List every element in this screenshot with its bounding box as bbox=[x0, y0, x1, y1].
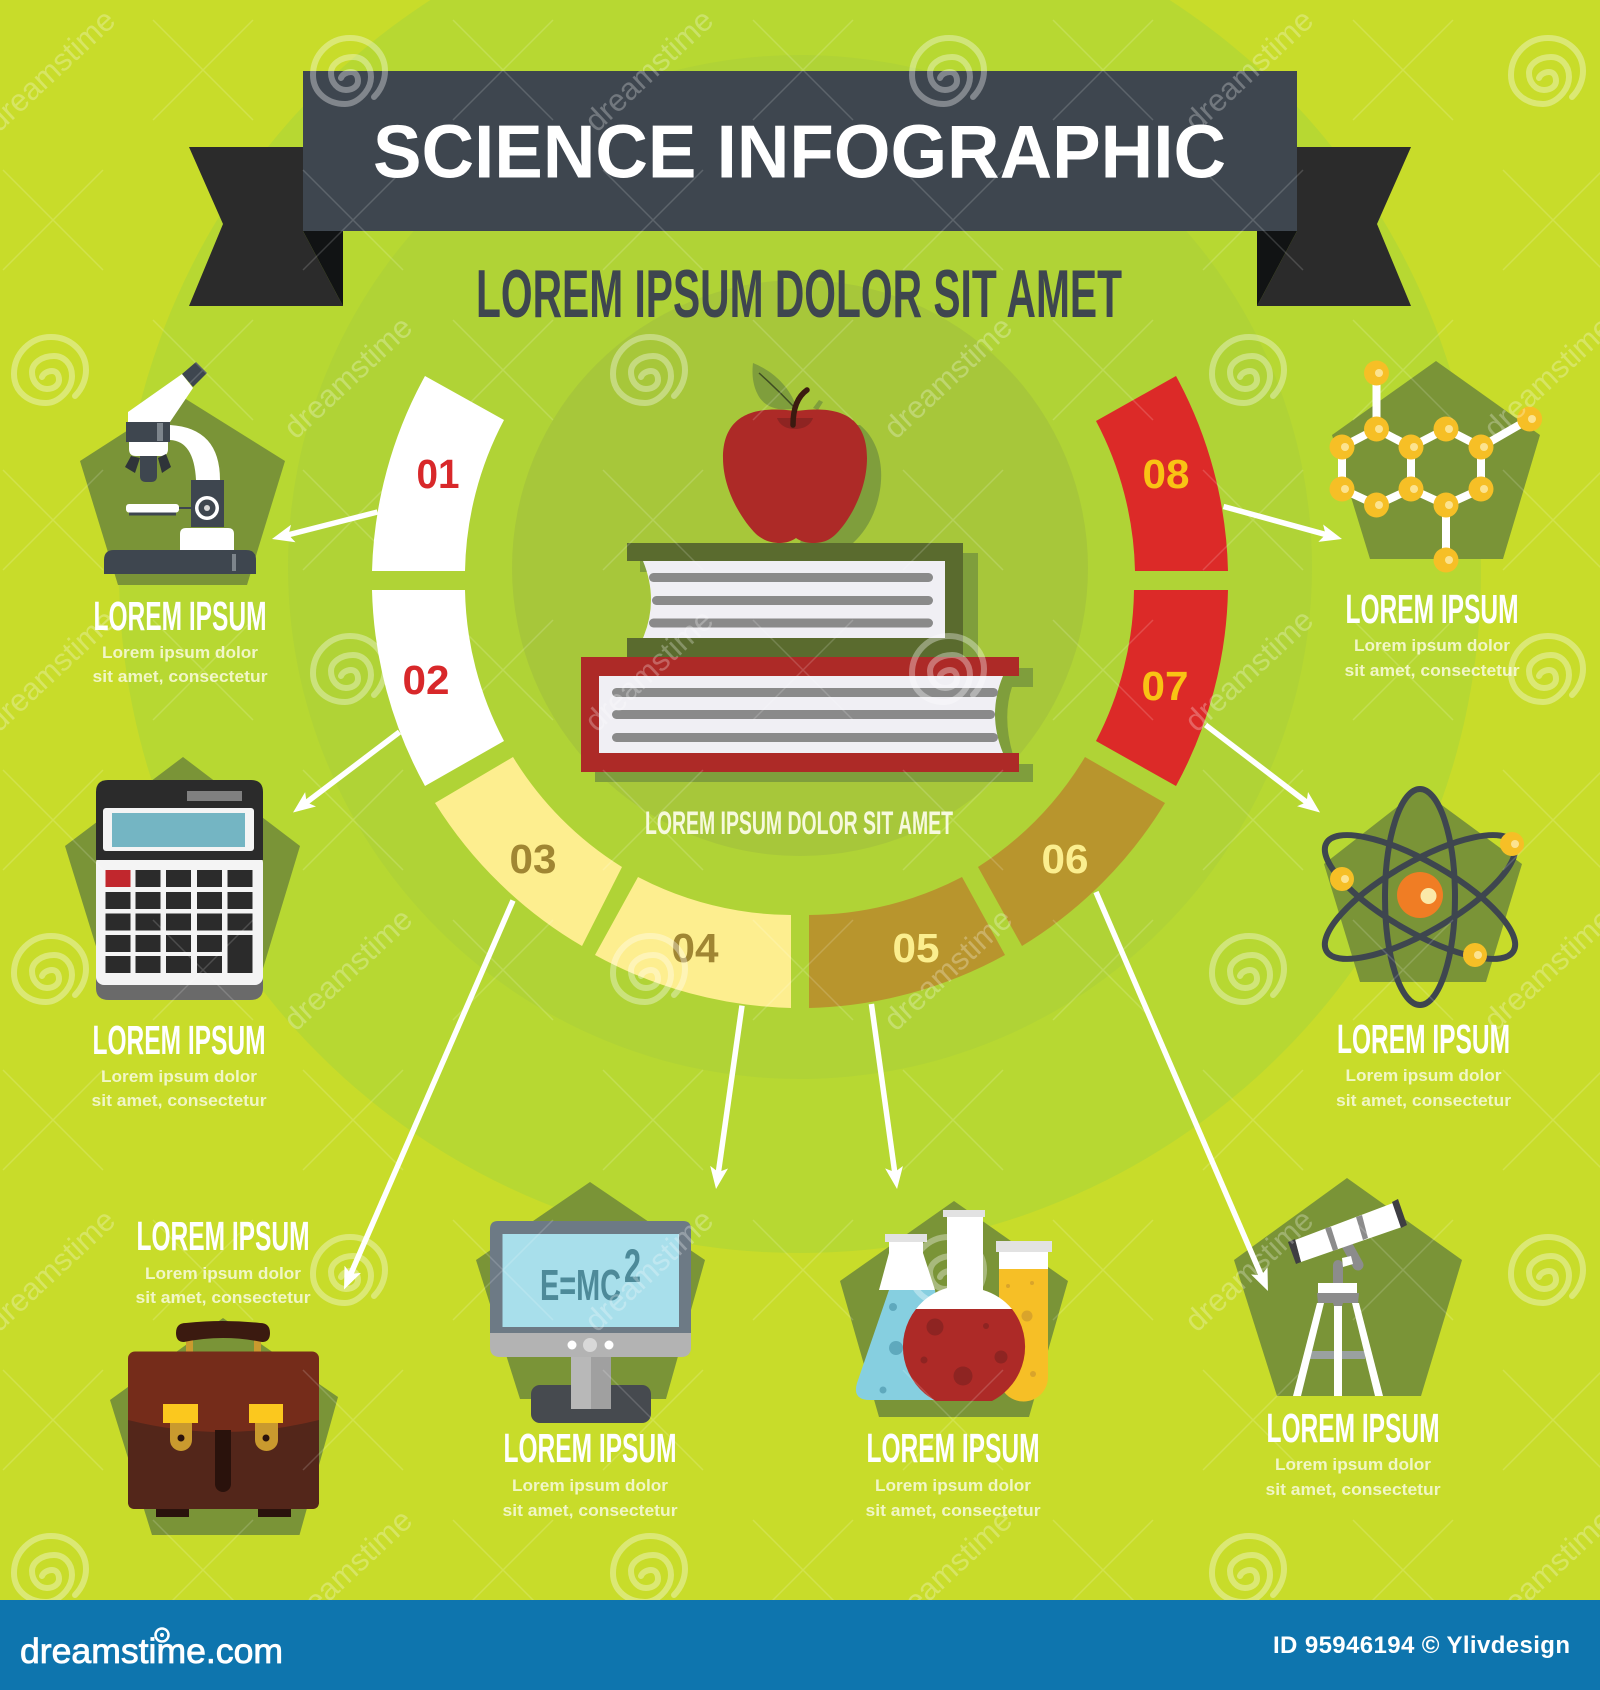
item: flasks bbox=[840, 1201, 1068, 1520]
footer image id and credit: ID 95946194 © Ylivdesign bbox=[1273, 1632, 1570, 1659]
watermark overlay: dreamstime bbox=[578, 602, 720, 738]
central illustration: apple on books bbox=[581, 363, 1033, 841]
label: Lorem ipsum dolor bbox=[875, 1476, 1031, 1495]
label: sit amet, consectetur bbox=[1336, 1091, 1511, 1110]
icon: apple bbox=[723, 363, 881, 543]
icon: calculator bbox=[65, 757, 300, 1000]
label bbox=[866, 1425, 1041, 1520]
item: telescope bbox=[1234, 1178, 1462, 1499]
arrow 03 bbox=[349, 900, 513, 1278]
segment 08 bbox=[1096, 376, 1228, 571]
segment 07: 07 bbox=[1142, 663, 1188, 709]
title: SCIENCE INFOGRAPHIC bbox=[373, 110, 1226, 194]
segment 03 bbox=[435, 757, 622, 946]
segment 05: 05 bbox=[892, 925, 940, 971]
segment 03: 03 bbox=[510, 836, 556, 882]
label: LOREM IPSUM bbox=[866, 1425, 1040, 1471]
watermark overlay: dreamstime bbox=[578, 2, 720, 138]
label bbox=[136, 1213, 311, 1307]
item: calculator bbox=[65, 757, 300, 1110]
icon: molecule bbox=[1330, 360, 1542, 572]
segment 05 bbox=[809, 877, 1005, 1008]
item: monitor bbox=[476, 1182, 705, 1520]
segment 07 bbox=[1096, 590, 1228, 786]
label: Lorem ipsum dolor bbox=[145, 1264, 301, 1283]
label bbox=[1344, 586, 1520, 680]
icon: atom bbox=[1309, 789, 1531, 1005]
arrow 02 bbox=[303, 732, 400, 805]
watermark overlay: dreamstime bbox=[277, 309, 419, 445]
label: LOREM IPSUM bbox=[504, 1425, 676, 1471]
arrow 05 bbox=[871, 1004, 895, 1177]
label: Lorem ipsum dolor bbox=[1346, 1066, 1502, 1085]
arrows from segments to items bbox=[284, 506, 1330, 1280]
item: atom bbox=[1309, 789, 1531, 1110]
icon: flasks bbox=[840, 1201, 1068, 1417]
segment 04 bbox=[595, 877, 791, 1008]
segment 04: 04 bbox=[672, 925, 719, 971]
item: briefcase bbox=[110, 1213, 338, 1535]
label: sit amet, consectetur bbox=[1266, 1480, 1441, 1499]
label bbox=[502, 1425, 678, 1520]
icon: monitor: E=MC bbox=[540, 1261, 621, 1310]
label: sit amet, consectetur bbox=[92, 667, 268, 686]
segment 06 bbox=[978, 757, 1165, 946]
segment 02 bbox=[372, 590, 504, 786]
icon: briefcase bbox=[110, 1318, 338, 1535]
icon: telescope bbox=[1234, 1178, 1462, 1396]
label: sit amet, consectetur bbox=[136, 1288, 311, 1307]
label bbox=[1336, 1016, 1511, 1110]
label bbox=[92, 593, 268, 686]
icon: monitor: 2 bbox=[624, 1239, 641, 1292]
label: sit amet, consectetur bbox=[502, 1501, 678, 1520]
footer bar bbox=[0, 1600, 1600, 1690]
arrow 08 bbox=[1224, 506, 1330, 536]
label: sit amet, consectetur bbox=[866, 1501, 1041, 1520]
label: LOREM IPSUM bbox=[92, 1017, 266, 1063]
watermark overlay: dreamstime bbox=[1178, 2, 1320, 138]
subtitle: LOREM IPSUM DOLOR SIT AMET bbox=[476, 256, 1122, 332]
watermark overlay: dreamstime bbox=[877, 1502, 1019, 1638]
watermark overlay: dreamstime bbox=[578, 1202, 720, 1338]
watermark overlay: dreamstime bbox=[277, 901, 419, 1037]
watermark overlay: dreamstime bbox=[877, 309, 1019, 445]
item: microscope bbox=[80, 362, 285, 686]
arrow 04 bbox=[718, 1006, 742, 1177]
arrow 06 bbox=[1096, 892, 1263, 1280]
label: sit amet, consectetur bbox=[92, 1091, 267, 1110]
label: Lorem ipsum dolor bbox=[512, 1476, 668, 1495]
icon: microscope bbox=[80, 362, 285, 585]
caption: LOREM IPSUM DOLOR SIT AMET bbox=[645, 805, 953, 841]
segment 01: 01 bbox=[416, 451, 460, 497]
watermark overlay: dreamstime bbox=[277, 1502, 419, 1638]
segment 06: 06 bbox=[1042, 836, 1088, 882]
segment 01 bbox=[372, 376, 504, 571]
footer logo: dreamstime.com bbox=[20, 1632, 283, 1671]
arrow 01 bbox=[284, 512, 378, 536]
label: sit amet, consectetur bbox=[1344, 661, 1520, 680]
label: LOREM IPSUM bbox=[94, 593, 266, 639]
segment 08: 08 bbox=[1142, 451, 1190, 497]
watermark overlay: dreamstime bbox=[877, 901, 1019, 1037]
watermark overlay: dreamstime bbox=[1178, 602, 1320, 738]
icon: monitor bbox=[476, 1182, 705, 1423]
watermark overlay: dreamstime bbox=[1178, 1202, 1320, 1338]
label: LOREM IPSUM bbox=[136, 1213, 310, 1259]
icon: upper book bbox=[627, 543, 978, 657]
label bbox=[1266, 1405, 1441, 1499]
ring of numbered segments bbox=[372, 376, 1228, 1008]
segment 02: 02 bbox=[402, 657, 450, 703]
label: Lorem ipsum dolor bbox=[1354, 636, 1510, 655]
label: Lorem ipsum dolor bbox=[101, 1067, 257, 1086]
label bbox=[92, 1017, 267, 1110]
banner ribbon with title bbox=[189, 71, 1411, 306]
arrow 07 bbox=[1206, 725, 1310, 805]
label: Lorem ipsum dolor bbox=[1275, 1455, 1431, 1474]
label: LOREM IPSUM bbox=[1266, 1405, 1440, 1451]
icon: lower book bbox=[581, 657, 1033, 782]
label: Lorem ipsum dolor bbox=[102, 643, 258, 662]
item: molecule bbox=[1330, 360, 1542, 680]
